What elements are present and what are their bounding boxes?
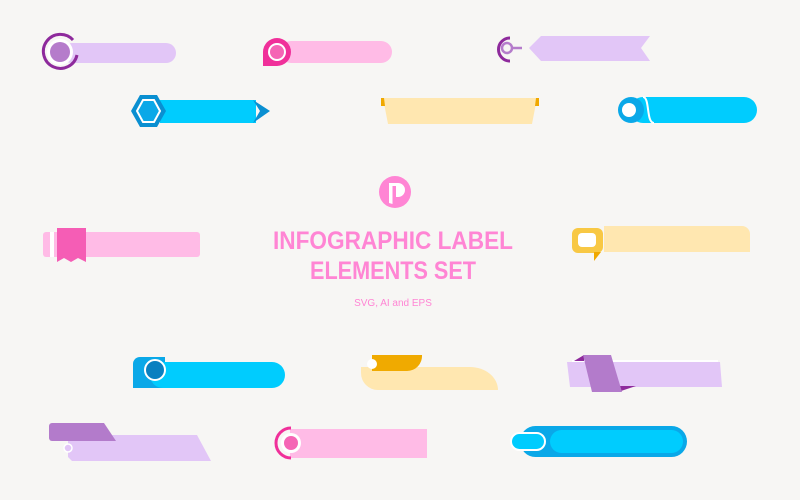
label: purple ring bar — [43, 34, 176, 68]
label: purple ribbon with key — [499, 36, 650, 61]
label: purple slanted tab — [49, 423, 211, 461]
label: yellow curved tab — [361, 355, 498, 390]
label: blue hexagon arrow — [131, 95, 270, 127]
title — [273, 227, 513, 285]
label: pink pin bar — [263, 38, 392, 66]
subtitle: SVG, AI and EPS — [354, 298, 432, 309]
title: INFOGRAPHIC LABEL — [273, 227, 513, 255]
label: pink ring bar — [276, 428, 427, 458]
label: blue bar with dark circle — [133, 357, 285, 388]
label: blue pill with circle — [618, 97, 757, 123]
logo icon — [379, 176, 411, 208]
label: purple folded ribbon — [567, 355, 722, 392]
label: yellow trapezoid — [381, 98, 539, 124]
label: yellow speech bubble bar — [572, 226, 750, 261]
label: pink bookmark bar — [43, 228, 200, 262]
title: ELEMENTS SET — [310, 257, 476, 285]
label: blue capsule — [511, 426, 687, 457]
